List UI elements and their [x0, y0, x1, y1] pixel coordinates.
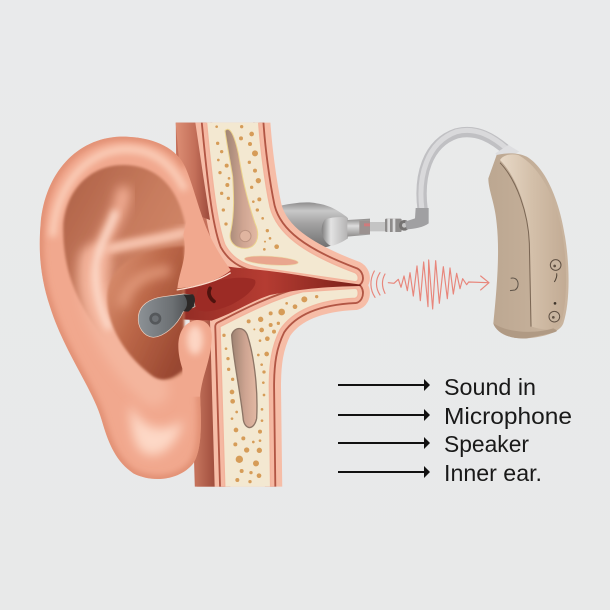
upper cavity — [225, 129, 258, 248]
tissue layers — [176, 110, 358, 493]
arrow: speaker — [338, 437, 430, 449]
tube collar — [495, 145, 519, 162]
legend — [338, 374, 572, 486]
arrow: sound in — [338, 379, 430, 391]
elbow — [405, 208, 429, 229]
upper cavity bulb — [240, 230, 251, 242]
upper button — [550, 260, 561, 282]
side switch — [510, 278, 518, 291]
hearing aid — [405, 130, 569, 338]
skin shading — [40, 137, 201, 479]
label: microphone: Microphone — [444, 403, 572, 429]
cross-section of ear canal wall — [170, 110, 361, 493]
device: receiver capsule and connector — [273, 202, 410, 249]
lower cavity — [232, 328, 257, 428]
ear canal — [170, 267, 361, 321]
outer ear — [40, 137, 231, 479]
capsule nozzle — [322, 217, 348, 246]
label: sound in: Sound in — [444, 374, 536, 400]
aid bright side panel — [500, 154, 566, 329]
panel seam — [500, 163, 531, 327]
concha bowl — [107, 246, 184, 379]
lower button — [549, 311, 560, 322]
tube — [421, 130, 508, 210]
antihelix ridges — [94, 193, 185, 390]
upper bone — [206, 117, 358, 282]
tragus — [177, 200, 231, 288]
indicator dot — [554, 302, 556, 305]
arrow: inner ear — [338, 466, 430, 478]
lobe bump highlight — [187, 325, 203, 355]
concha inner glow — [122, 270, 170, 307]
sound wave — [371, 260, 489, 309]
wave arrowhead — [481, 276, 489, 290]
bone pores — [215, 125, 318, 483]
tragus edge — [177, 273, 231, 290]
lower bone — [220, 288, 358, 493]
flat pink cavity — [244, 254, 299, 267]
sound arcs — [371, 271, 385, 297]
ear hollow — [63, 165, 185, 381]
arrow: microphone — [338, 409, 430, 421]
aid body — [488, 153, 569, 338]
connector with red mark — [347, 219, 410, 237]
label: speaker: Speaker — [444, 431, 529, 457]
lower wall band — [190, 321, 215, 487]
upper wall band — [176, 123, 210, 220]
waveform — [388, 260, 488, 309]
capsule body — [273, 202, 347, 249]
outer shade — [493, 323, 557, 338]
ear silhouette — [40, 137, 231, 479]
lobe bump — [178, 320, 212, 397]
canal chamber — [193, 278, 255, 311]
label: inner ear: Inner ear. — [444, 460, 542, 486]
earpiece tip — [138, 294, 195, 337]
